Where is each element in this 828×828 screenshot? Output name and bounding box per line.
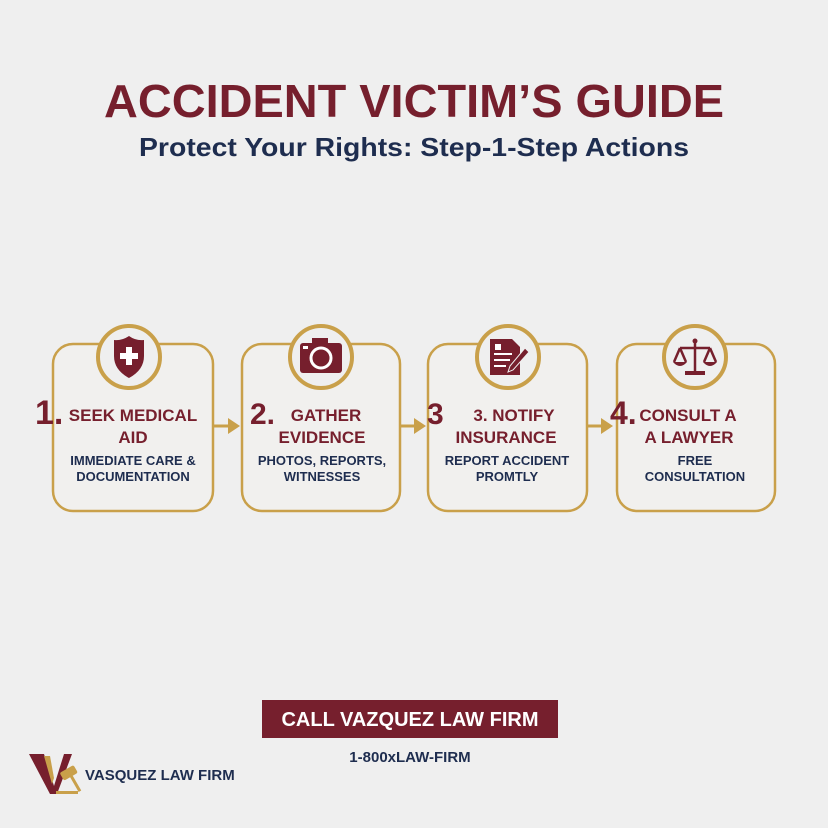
- arrow 2: [400, 418, 426, 434]
- arrow 3: [587, 418, 613, 434]
- step 2 text: EVIDENCE: [279, 428, 365, 447]
- step 4 text: A LAWYER: [644, 428, 734, 447]
- step 2 text: [250, 398, 386, 484]
- icon: camera: [290, 326, 352, 388]
- step 3 text: 3: [427, 398, 444, 431]
- step 1 text: [35, 394, 197, 484]
- step 2 text: PHOTOS, REPORTS,: [258, 453, 386, 468]
- step 2 card: [242, 326, 400, 511]
- subtitle: Protect Your Rights: Step-1-Step Actions: [139, 132, 689, 162]
- step 4 text: CONSULT A: [639, 406, 737, 425]
- step 4 card: [610, 326, 775, 511]
- title: ACCIDENT VICTIM’S GUIDE: [104, 75, 724, 127]
- step 4 text: FREE: [678, 453, 713, 468]
- logo text: VASQUEZ LAW FIRM: [85, 767, 235, 784]
- call button: [262, 700, 558, 738]
- icon: scales: [664, 326, 726, 388]
- step 1 text: DOCUMENTATION: [76, 469, 190, 484]
- step 3 card: [427, 326, 587, 511]
- step 4 text: CONSULTATION: [645, 469, 745, 484]
- call button: CALL VAZQUEZ LAW FIRM: [281, 709, 539, 731]
- step 1 text: IMMEDIATE CARE &: [70, 453, 196, 468]
- icon: medical shield: [98, 326, 160, 388]
- step 2 text: WITNESSES: [284, 469, 361, 484]
- step 2 text: GATHER: [291, 406, 361, 425]
- step 1 text: SEEK MEDICAL: [69, 406, 197, 425]
- step 3 text: [427, 398, 569, 484]
- step 4 text: [610, 395, 745, 484]
- step 3 text: PROMTLY: [476, 469, 539, 484]
- logo: [29, 754, 235, 795]
- step 3 text: INSURANCE: [455, 428, 557, 447]
- phone number: 1-800xLAW-FIRM: [349, 749, 471, 766]
- step 1 card: [35, 326, 213, 511]
- step 3 text: REPORT ACCIDENT: [445, 453, 569, 468]
- step 3 text: 3. NOTIFY: [473, 406, 555, 425]
- step 4 text: 4.: [610, 395, 637, 431]
- arrow 1: [213, 418, 240, 434]
- step 2 text: 2.: [250, 398, 275, 431]
- step 1 text: 1.: [35, 394, 63, 432]
- step 1 text: AID: [118, 428, 148, 447]
- icon: form with pen: [477, 326, 539, 388]
